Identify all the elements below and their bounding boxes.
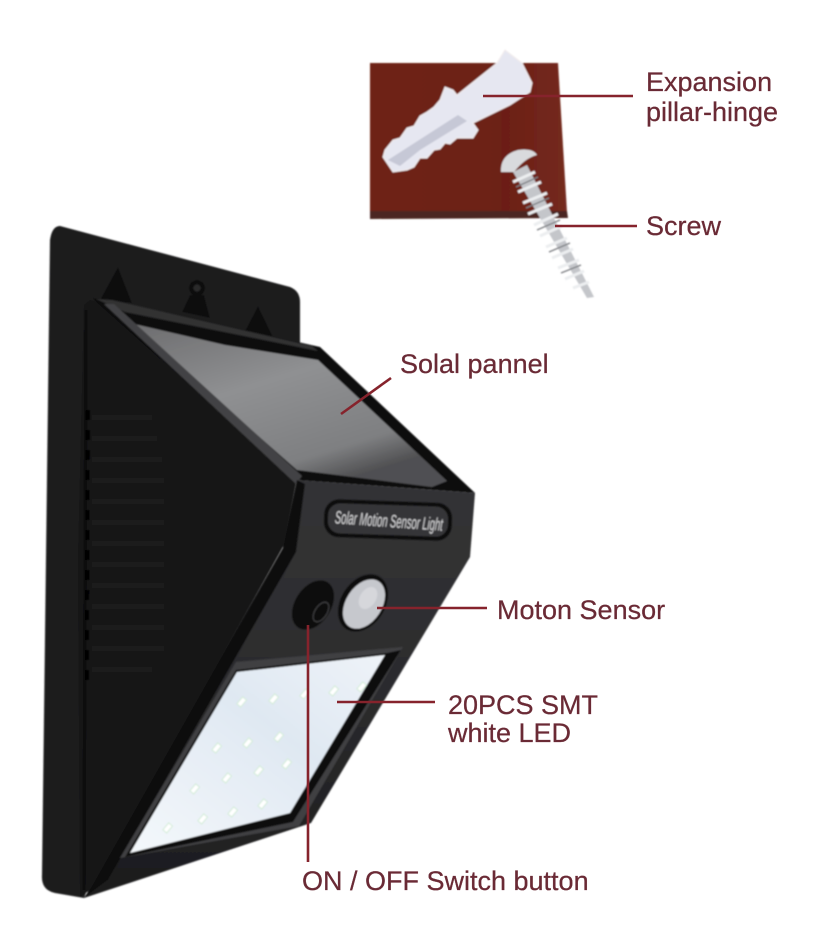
label: motion sensor: Moton Sensor [497, 595, 665, 625]
label: 20pcs smt white led [447, 690, 598, 748]
rim highlight [104, 304, 302, 484]
label: on/off switch button: ON / OFF Switch button [302, 866, 589, 896]
side panel [78, 300, 297, 897]
solar panel [130, 323, 447, 487]
leader lines [308, 96, 637, 862]
label: expansion pillar-hinge: Expansion [646, 67, 772, 97]
name badge: Solar Motion Sensor Light [334, 507, 444, 535]
name badge [323, 499, 453, 541]
label: expansion pillar-hinge [646, 67, 778, 127]
top frame [92, 298, 475, 493]
back plate [42, 226, 300, 898]
sloped edge [84, 480, 305, 898]
mounting accessories photo [370, 50, 594, 298]
front face [84, 480, 475, 898]
on/off button [283, 573, 343, 637]
motion sensor [328, 565, 398, 641]
icon: expansion plug [383, 50, 532, 172]
led panel [130, 655, 385, 853]
label: solar panel: Solal pannel [400, 349, 549, 379]
label: 20pcs smt white led: 20PCS SMT [448, 690, 598, 720]
label: 20pcs smt white led: white LED [447, 718, 571, 748]
label: expansion pillar-hinge: pillar-hinge [646, 97, 778, 127]
icon: screw [501, 150, 594, 298]
red backing plate [370, 63, 568, 219]
label: screw: Screw [646, 211, 722, 241]
solar motion sensor light [42, 226, 475, 898]
led frame [120, 647, 403, 858]
